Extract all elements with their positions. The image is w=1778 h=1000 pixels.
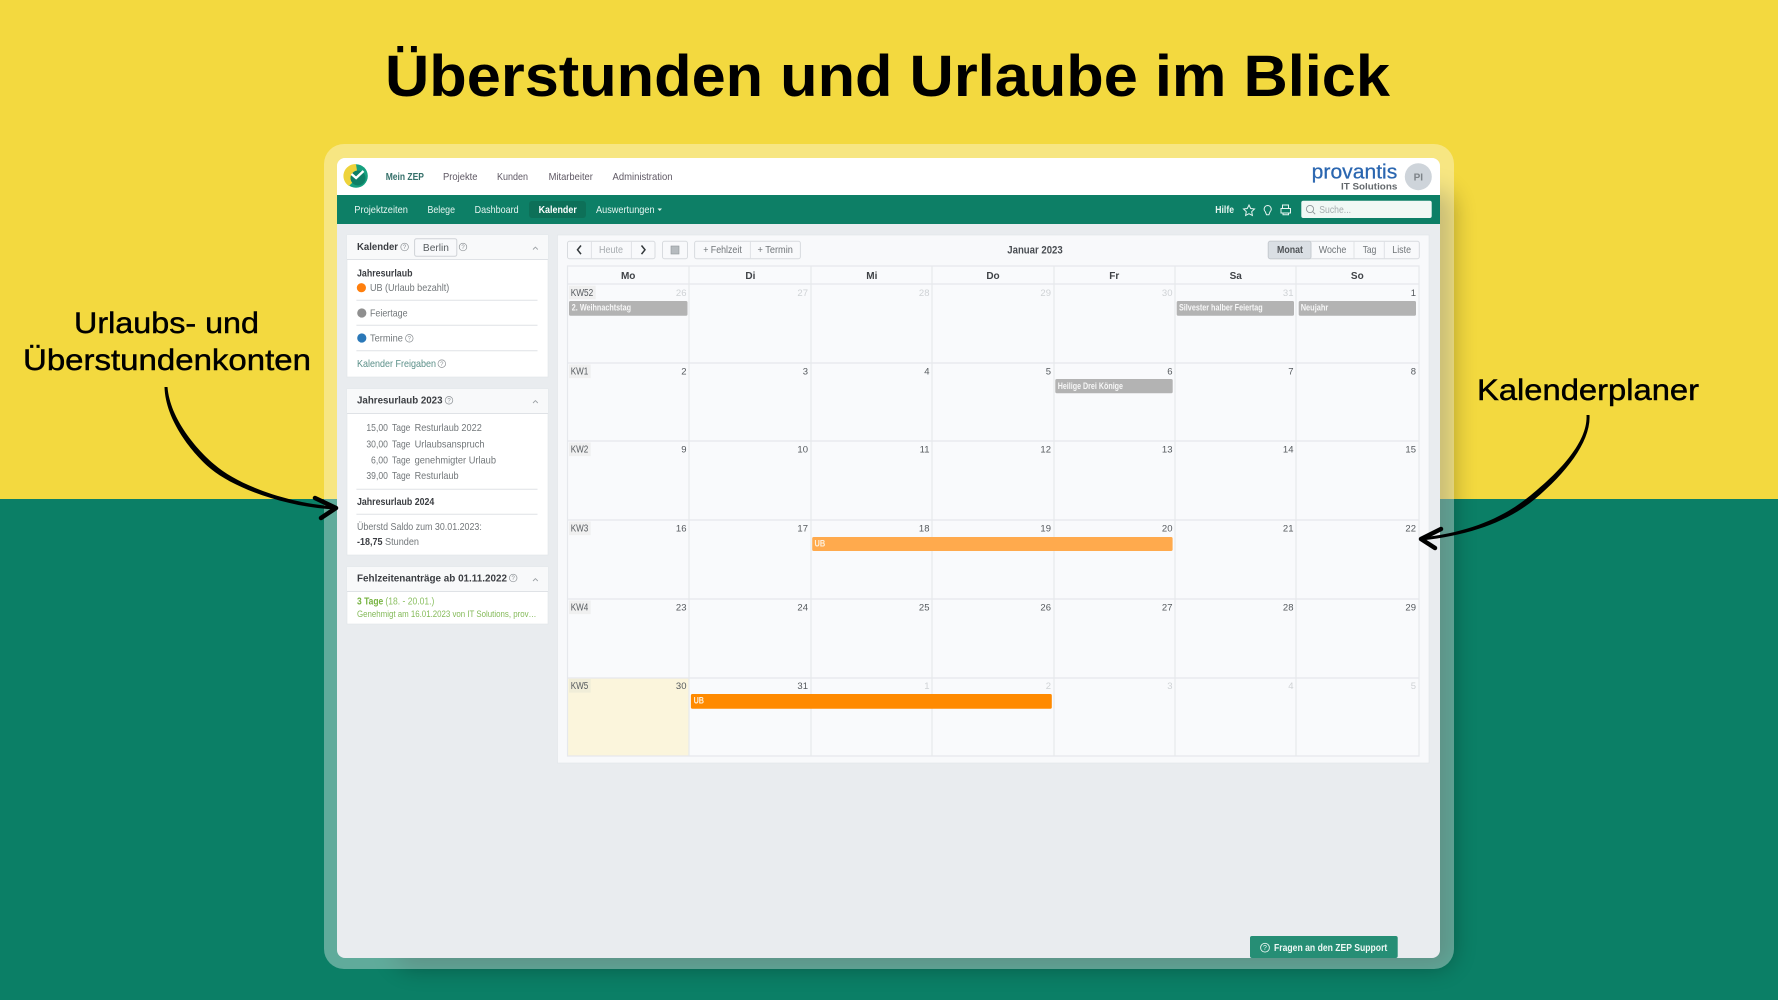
request status: Genehmigt am 16.01.2023 von IT Solutions, prov… bbox=[357, 609, 536, 619]
toolbar: add buttons: + Termin bbox=[758, 244, 793, 256]
help icon: ? bbox=[512, 576, 516, 582]
toolbar: calendar button bbox=[662, 241, 688, 259]
day numbers: 30 bbox=[676, 681, 686, 692]
Berlin button bbox=[415, 239, 457, 256]
legend: Feiertage bbox=[357, 307, 408, 319]
menu: Projekte: Projekte bbox=[443, 171, 478, 183]
weekday headers: Mo bbox=[621, 271, 635, 282]
toolbar: view switch: Tag bbox=[1363, 244, 1376, 256]
weekday headers: Fr bbox=[1109, 271, 1119, 282]
toolbar: add buttons bbox=[695, 241, 800, 259]
legend: Feiertage: Feiertage bbox=[370, 307, 408, 319]
day numbers: 16 bbox=[676, 523, 686, 534]
chevron bbox=[533, 247, 538, 250]
menu: Kunden: Kunden bbox=[497, 171, 528, 183]
annotation: Urlaubs- und Überstundenkonten: Überstundenkonten bbox=[23, 344, 311, 377]
day numbers: 28 bbox=[1283, 602, 1294, 613]
week labels: KW4 bbox=[571, 602, 589, 613]
chevron bbox=[533, 401, 538, 403]
background: yellow band bbox=[0, 0, 1778, 499]
event: UB 18.-20. January: UB bbox=[814, 538, 825, 550]
menu: Mitarbeiter: Mitarbeiter bbox=[549, 171, 593, 183]
button: ZEP support: Fragen an den ZEP Support bbox=[1274, 942, 1388, 954]
logo: provantis: IT Solutions bbox=[1341, 181, 1397, 192]
nav: Belege: Belege bbox=[428, 204, 455, 216]
day numbers: 3 bbox=[1167, 681, 1172, 692]
row: Resturlaub: Tage bbox=[392, 470, 411, 482]
day numbers: 9 bbox=[681, 445, 686, 456]
secondary green navigation bar bbox=[337, 195, 1440, 224]
week labels: KW2 bbox=[571, 445, 589, 456]
event: Silvester halber Feiertag: Silvester halber Feiertag bbox=[1179, 302, 1263, 314]
logo: provantis bbox=[1312, 161, 1397, 192]
nav: Hilfe: Hilfe bbox=[1215, 204, 1234, 216]
heading: Jahresurlaub 2023: Jahresurlaub 2023 bbox=[357, 395, 443, 407]
request dates: 3 Tage bbox=[357, 595, 383, 607]
day numbers: 2 bbox=[681, 366, 686, 378]
row: Resturlaub 2022: 15,00 bbox=[366, 422, 388, 434]
nav: Projektzeiten: Projektzeiten bbox=[354, 204, 408, 216]
nav: Dashboard: Dashboard bbox=[475, 204, 519, 216]
avatar: PI bbox=[1414, 172, 1423, 183]
row: Urlaubsanspruch bbox=[366, 438, 485, 450]
Berlin button: Berlin bbox=[423, 242, 449, 254]
help icon bbox=[509, 574, 517, 582]
day numbers: 14 bbox=[1283, 445, 1294, 456]
day numbers: 31 bbox=[797, 681, 808, 692]
help icon bbox=[459, 243, 467, 251]
row: Resturlaub 2022 bbox=[366, 422, 482, 434]
day numbers: 18 bbox=[919, 523, 930, 534]
row: Urlaubsanspruch: 30,00 bbox=[366, 438, 388, 450]
request dates bbox=[357, 595, 434, 607]
event: 2. Weihnachtstag bbox=[569, 301, 688, 316]
day numbers: 31 bbox=[1283, 288, 1294, 299]
day numbers: 20 bbox=[1162, 523, 1172, 534]
search box bbox=[1301, 201, 1432, 218]
row: Resturlaub: Resturlaub bbox=[415, 470, 459, 482]
event: UB 18.-20. January bbox=[812, 537, 1173, 551]
day numbers: 17 bbox=[797, 523, 808, 534]
row: Resturlaub bbox=[366, 470, 459, 482]
toolbar: view switch: Monat bbox=[1277, 244, 1303, 256]
translucent screenshot frame bbox=[324, 144, 1454, 969]
day numbers: 1 bbox=[924, 681, 930, 692]
arrow: left annotation to accounts panel bbox=[164, 387, 336, 518]
panel: Jahresurlaub 2023 bbox=[347, 389, 548, 555]
week labels: KW5 bbox=[571, 681, 589, 692]
legend: Termine bbox=[357, 333, 413, 345]
button: ZEP support bbox=[1250, 936, 1398, 958]
weekday headers: So bbox=[1351, 271, 1364, 282]
calendar grid bbox=[568, 266, 1419, 756]
heading: Fehlzeitenanträge: Fehlzeitenanträge ab 01.11.2022 bbox=[357, 573, 507, 585]
help icon bbox=[445, 396, 453, 404]
day numbers: 29 bbox=[1405, 602, 1416, 613]
day numbers: 28 bbox=[919, 288, 930, 299]
row: Resturlaub 2022: Tage bbox=[392, 422, 411, 434]
day numbers: 1 bbox=[1411, 288, 1416, 299]
day numbers: 23 bbox=[676, 602, 686, 613]
text: Überstd Saldo: Überstd Saldo zum 30.01.2023: bbox=[357, 521, 482, 533]
day numbers: 3 bbox=[803, 366, 808, 378]
day numbers: 24 bbox=[797, 602, 808, 613]
week labels: KW52 bbox=[571, 288, 594, 299]
weekday headers: Sa bbox=[1230, 271, 1242, 282]
row: genehmigter Urlaub: genehmigter Urlaub bbox=[415, 454, 496, 466]
top navigation bar bbox=[337, 158, 1440, 195]
day numbers: 8 bbox=[1411, 366, 1416, 378]
day numbers: 27 bbox=[1162, 602, 1172, 613]
toolbar: add buttons: + Fehlzeit bbox=[703, 244, 742, 256]
avatar bbox=[1405, 163, 1432, 190]
weekday headers: Do bbox=[986, 271, 1000, 282]
toolbar: view switch: Woche bbox=[1319, 244, 1346, 256]
event: Heilige Drei Könige: Heilige Drei Könige bbox=[1058, 381, 1123, 392]
day numbers bbox=[676, 288, 1416, 692]
event: Heilige Drei Könige bbox=[1055, 379, 1173, 393]
nav: active Kalender tab: Kalender bbox=[539, 204, 577, 216]
background: green band bbox=[0, 499, 1778, 1000]
annotation: Urlaubs- und Überstundenkonten: Urlaubs- und bbox=[74, 307, 259, 340]
annotation: Kalenderplaner: Kalenderplaner bbox=[1477, 374, 1699, 407]
row: genehmigter Urlaub bbox=[371, 454, 496, 466]
frame shadow bbox=[395, 190, 1453, 968]
day numbers: 13 bbox=[1162, 445, 1172, 456]
row: Resturlaub: 39,00 bbox=[366, 470, 388, 482]
weekday headers bbox=[621, 271, 1364, 282]
day numbers: 21 bbox=[1283, 523, 1294, 534]
event: UB 31. January - 2. February: UB bbox=[694, 696, 704, 706]
legend: Termine: Termine bbox=[370, 333, 403, 345]
day numbers: 26 bbox=[1040, 602, 1051, 613]
help icon bbox=[401, 243, 408, 251]
help icon: ? bbox=[447, 398, 451, 404]
toolbar: date navigation: Heute bbox=[599, 244, 623, 256]
arrow: right annotation to calendar bbox=[1421, 415, 1590, 548]
day numbers: 22 bbox=[1405, 523, 1416, 534]
day numbers: 4 bbox=[1288, 681, 1294, 692]
logo: provantis: provantis bbox=[1312, 161, 1397, 183]
weekday headers: Di bbox=[745, 271, 756, 282]
button: ZEP support: ? bbox=[1263, 945, 1267, 952]
day numbers: 12 bbox=[1040, 445, 1051, 456]
link: Kalender Freigaben: Kalender Freigaben bbox=[357, 358, 436, 370]
day numbers: 26 bbox=[676, 288, 686, 299]
day numbers: 19 bbox=[1040, 523, 1051, 534]
weekday headers: Mi bbox=[866, 271, 878, 282]
day numbers: 27 bbox=[797, 288, 808, 299]
today cell highlight bbox=[568, 678, 688, 756]
icon: printer bbox=[1281, 205, 1290, 215]
row: genehmigter Urlaub: Tage bbox=[392, 454, 411, 466]
heading: Jahresurlaub 2024: Jahresurlaub 2024 bbox=[357, 496, 434, 508]
title: Überstunden und Urlaube im Blick bbox=[385, 44, 1391, 109]
text: Stunden value: Stunden bbox=[385, 536, 419, 548]
app background bbox=[337, 158, 1440, 958]
text: Stunden value bbox=[357, 536, 419, 548]
day numbers: 10 bbox=[797, 445, 808, 456]
legend: Termine: ? bbox=[408, 336, 412, 342]
day numbers: 6 bbox=[1167, 366, 1172, 378]
event: Neujahr: Neujahr bbox=[1301, 302, 1329, 314]
panel: Kalender legend bbox=[347, 235, 548, 377]
icon: light bulb bbox=[1264, 206, 1271, 215]
week labels bbox=[569, 286, 596, 693]
heading: Jahresurlaub: Jahresurlaub bbox=[357, 268, 412, 280]
help icon: ? bbox=[403, 245, 407, 251]
annotation: Urlaubs- und Überstundenkonten bbox=[23, 307, 311, 377]
day numbers: 5 bbox=[1046, 366, 1051, 378]
toolbar: date navigation bbox=[568, 241, 655, 259]
row: Urlaubsanspruch: Tage bbox=[392, 438, 411, 450]
legend: UB: UB (Urlaub bezahlt) bbox=[370, 282, 449, 294]
day numbers: 11 bbox=[920, 445, 930, 456]
event: Neujahr bbox=[1299, 301, 1416, 316]
row: genehmigter Urlaub: 6,00 bbox=[371, 454, 388, 466]
help icon: ? bbox=[461, 245, 465, 251]
event: 2. Weihnachtstag: 2. Weihnachtstag bbox=[572, 302, 631, 314]
week labels: KW3 bbox=[571, 523, 589, 534]
row: Urlaubsanspruch: Urlaubsanspruch bbox=[415, 438, 485, 450]
row: Resturlaub 2022: Resturlaub 2022 bbox=[415, 422, 482, 434]
day numbers: 30 bbox=[1162, 288, 1172, 299]
icon: star bbox=[1243, 205, 1254, 216]
request dates: (18. - 20.01.) bbox=[385, 595, 434, 607]
panel: Fehlzeitenanträge bbox=[347, 567, 548, 624]
menu: Administration: Administration bbox=[612, 171, 673, 183]
nav: active Kalender tab bbox=[529, 201, 586, 218]
week labels: KW1 bbox=[571, 366, 589, 378]
chevron bbox=[533, 579, 538, 581]
heading: Kalender: Kalender bbox=[357, 241, 398, 253]
day numbers: 29 bbox=[1040, 288, 1051, 299]
calendar month title: Januar 2023 bbox=[1007, 245, 1063, 257]
event: UB 31. January - 2. February bbox=[691, 694, 1052, 709]
day numbers: 2 bbox=[1046, 681, 1051, 692]
day numbers: 25 bbox=[919, 602, 930, 613]
nav: Auswertungen: Auswertungen bbox=[596, 204, 655, 216]
link: Kalender Freigaben: ? bbox=[440, 362, 444, 368]
search box: Suche... bbox=[1319, 204, 1351, 216]
app screenshot bbox=[337, 158, 1440, 958]
day numbers: 5 bbox=[1411, 681, 1416, 692]
icon: ZEP logo bbox=[343, 164, 368, 188]
day numbers: 7 bbox=[1288, 366, 1294, 378]
toolbar: view switch bbox=[1268, 241, 1419, 259]
panel: calendar bbox=[558, 235, 1429, 763]
text: Stunden value: -18,75 bbox=[357, 536, 383, 548]
day numbers: 4 bbox=[924, 366, 930, 378]
menu: Mein ZEP: Mein ZEP bbox=[386, 171, 424, 183]
toolbar: view switch: Liste bbox=[1392, 244, 1411, 256]
day numbers: 15 bbox=[1405, 445, 1416, 456]
